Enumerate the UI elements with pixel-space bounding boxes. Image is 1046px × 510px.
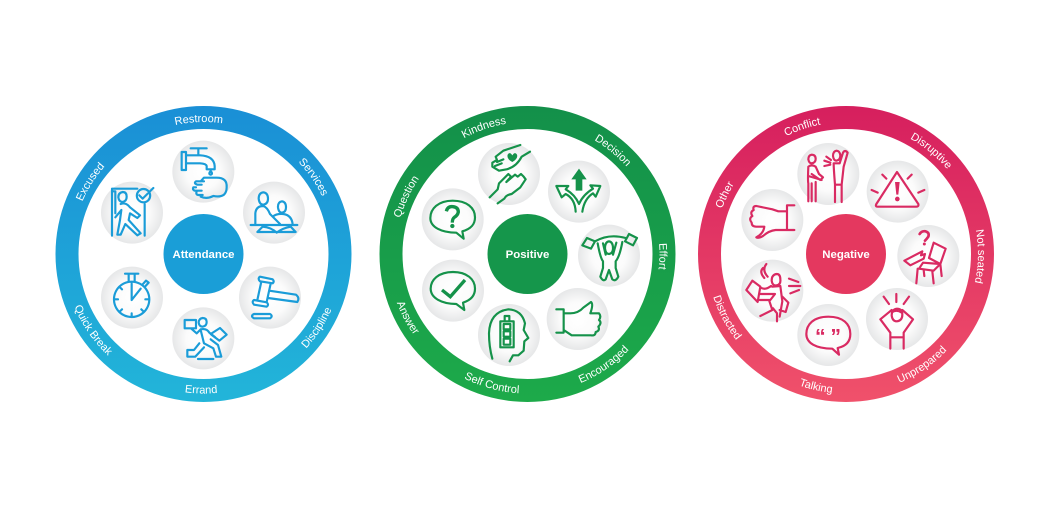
icon: gavel — [239, 267, 301, 329]
center hub: Attendance: Attendance — [172, 249, 235, 261]
label: Effort: Effort — [658, 244, 668, 270]
icon: three-way decision arrows — [548, 161, 610, 223]
icon: two people in conflict — [797, 143, 859, 205]
panel: Attendance wheel — [56, 106, 352, 402]
icon: stopwatch — [101, 267, 163, 329]
outer ring — [56, 106, 352, 402]
label: Discipline: Discipline — [301, 308, 331, 348]
label: Decision: Decision — [595, 134, 630, 166]
label: Errand: Errand — [186, 384, 217, 394]
icon: helping hands with heart — [478, 143, 540, 205]
icon: distracted student with book — [741, 260, 803, 322]
icon: person leaving door with checkmark — [101, 182, 163, 244]
icon: thumbs up — [547, 288, 609, 350]
icons: Positive — [422, 143, 640, 366]
icons: Attendance — [101, 141, 305, 369]
panel: Negative wheel — [698, 106, 994, 402]
label: Disruptive: Disruptive — [910, 132, 951, 168]
center hub: Positive: Positive — [506, 249, 549, 261]
label: Question: Question — [394, 176, 419, 217]
label: Kindness: Kindness — [461, 118, 506, 138]
label: Encouraged: Encouraged — [578, 344, 628, 383]
label: Talking: Talking — [801, 378, 832, 395]
label: Not seated: Not seated — [974, 230, 985, 284]
center hub: Negative: Negative — [822, 249, 870, 261]
label: Quick Break: Quick Break — [74, 305, 112, 356]
label: Excused: Excused — [76, 162, 104, 201]
label: Restroom: Restroom — [174, 115, 222, 125]
icon: weightlifter — [578, 225, 640, 287]
icon: speech bubble with checkmark — [422, 260, 484, 322]
panel: Positive wheel — [380, 106, 676, 402]
label: Self Control: Self Control — [465, 372, 519, 394]
icon: thumbs down — [741, 189, 803, 251]
icon: speech bubble with question mark — [422, 188, 484, 250]
outer ring — [380, 106, 676, 402]
icon: two people with book — [243, 182, 305, 244]
label: Other: Other — [716, 181, 733, 208]
label: Answer: Answer — [396, 302, 419, 334]
label: Unprepared: Unprepared — [897, 345, 946, 382]
outer ring — [698, 106, 994, 402]
icons: Negative — [741, 143, 959, 366]
center hub: Positive — [488, 214, 568, 294]
label: Services: Services — [300, 158, 327, 196]
center hub: Attendance — [164, 214, 244, 294]
icon: running courier — [172, 307, 234, 369]
icon: stressed person holding head — [866, 288, 928, 350]
icon: speech bubble with quotation marks: “” — [815, 324, 846, 348]
icon: faucet and hand — [172, 141, 234, 203]
center hub: Negative — [806, 214, 886, 294]
icon: head with traffic light — [478, 304, 540, 366]
icon: empty desk with question mark — [897, 225, 959, 287]
icon: speech bubble with quotation marks — [797, 304, 859, 366]
label: Distracted: Distracted — [714, 295, 742, 340]
icon: warning triangle — [867, 161, 929, 223]
label: Conflict: Conflict — [784, 118, 821, 135]
